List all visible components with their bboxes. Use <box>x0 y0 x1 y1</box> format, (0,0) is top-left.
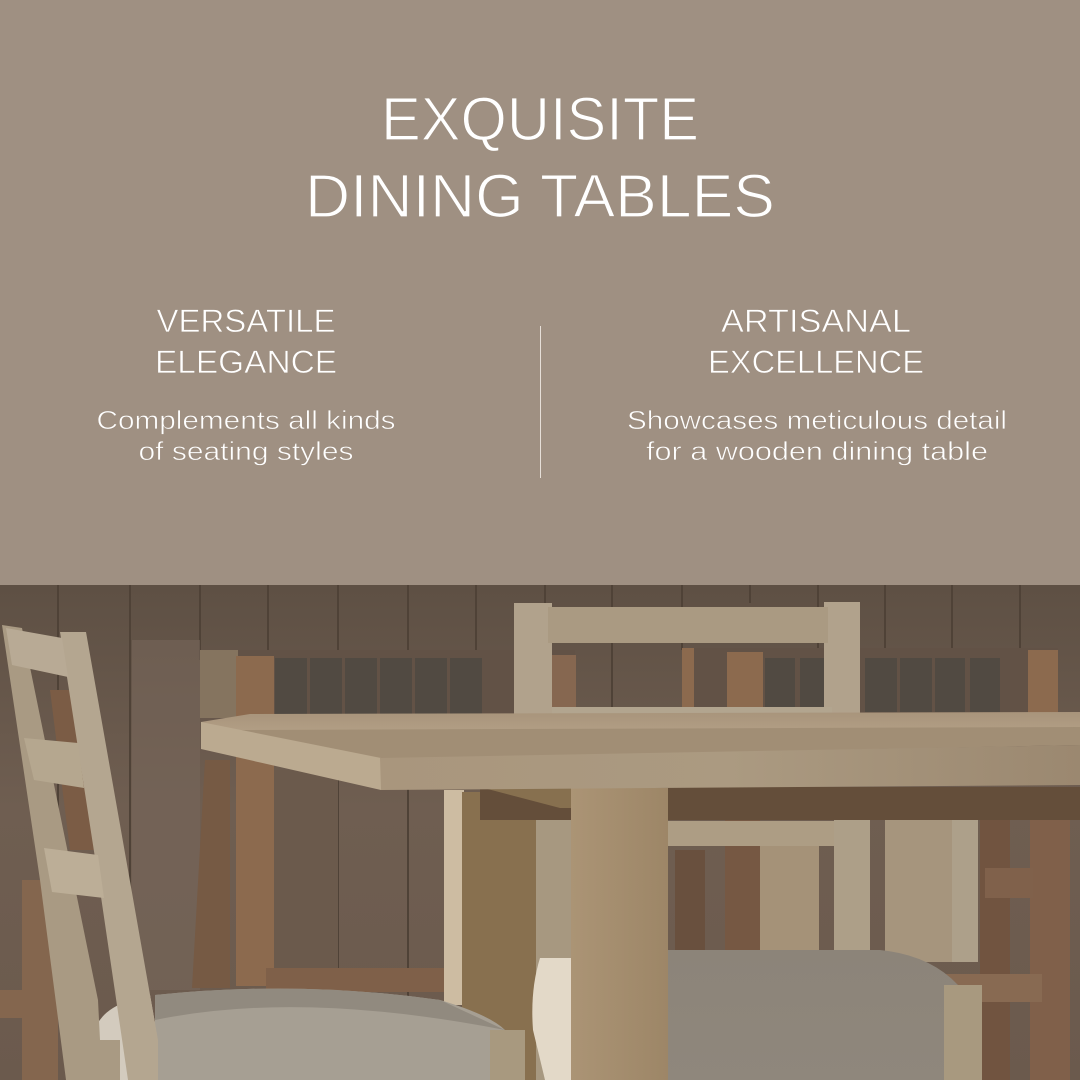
photo: dining table and chairs <box>0 585 1080 1080</box>
center divider <box>540 326 541 478</box>
feature: artisanal excellence: EXCELLENCE <box>708 344 924 380</box>
feature: versatile elegance: Complements all kinds <box>96 405 396 435</box>
wall planks <box>0 585 1080 1080</box>
feature: versatile elegance: VERSATILE <box>156 303 336 339</box>
feature: versatile elegance: ELEGANCE <box>155 344 337 380</box>
front center chair back <box>514 602 870 1080</box>
back left chair <box>192 650 576 992</box>
feature: artisanal excellence: ARTISANAL <box>721 303 911 339</box>
title: DINING TABLES <box>305 162 775 230</box>
background panel <box>0 0 1080 585</box>
table top <box>201 712 1080 790</box>
feature: versatile elegance: of seating styles <box>138 436 354 466</box>
front left chair <box>0 625 525 1080</box>
feature: artisanal excellence: Showcases meticulous detail <box>627 405 1007 435</box>
title <box>305 85 775 230</box>
feature: artisanal excellence: for a wooden dining table <box>646 436 988 466</box>
feature: versatile elegance <box>96 303 396 466</box>
front center chair seat <box>532 950 982 1080</box>
back gaps behind slats <box>50 690 100 850</box>
chair frame <box>2 625 100 1080</box>
title: EXQUISITE <box>381 85 699 153</box>
seat cushion <box>94 995 165 1080</box>
table legs <box>444 787 1080 1080</box>
back right chair <box>675 648 1070 1080</box>
feature: artisanal excellence <box>627 303 1007 466</box>
